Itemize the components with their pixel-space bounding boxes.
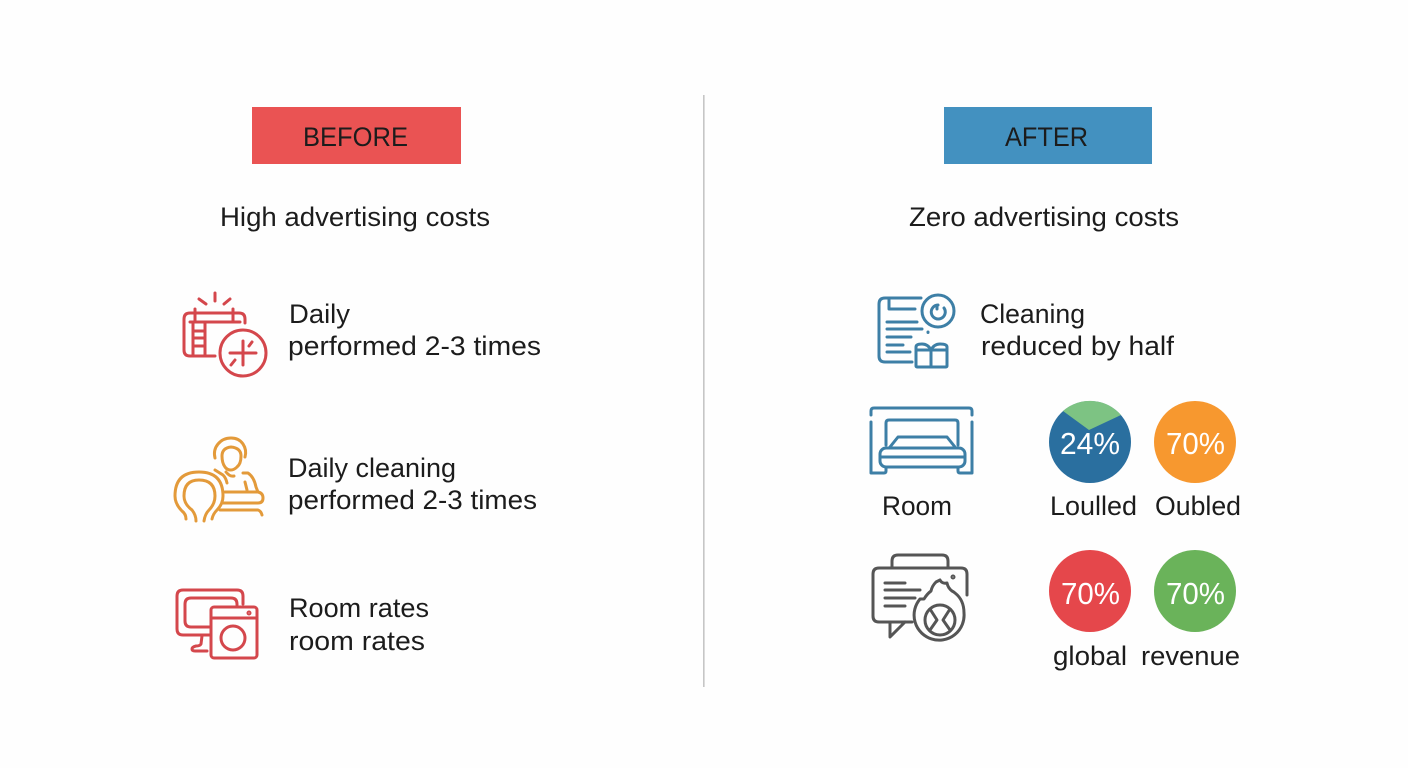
label: oubled: Oubled bbox=[1155, 491, 1241, 521]
text: cleaning reduced: Cleaning bbox=[980, 299, 1085, 329]
badge: orange 70 percent bbox=[1154, 401, 1236, 483]
badge: green 70 percent: 70% bbox=[1166, 576, 1225, 611]
text: room rates bbox=[289, 593, 429, 656]
badge: green 70 percent bbox=[1154, 550, 1236, 632]
icon: chat with ball bbox=[873, 555, 967, 640]
text: daily performed: performed 2-3 times bbox=[288, 331, 541, 361]
panel: after bbox=[871, 107, 1241, 671]
heading: after bbox=[944, 107, 1152, 164]
label: room: Room bbox=[882, 491, 952, 521]
subheading: zero advertising costs: Zero advertising costs bbox=[909, 202, 1179, 232]
text: daily performed bbox=[288, 299, 541, 361]
label: loulled: Loulled bbox=[1050, 491, 1137, 521]
badge: red 70 percent: 70% bbox=[1061, 576, 1120, 611]
text: daily cleaning: performed 2-3 times bbox=[288, 485, 537, 515]
text: room rates: room rates bbox=[289, 626, 425, 656]
heading: before bbox=[252, 107, 461, 164]
text: cleaning reduced bbox=[980, 299, 1175, 361]
icon: bed bbox=[871, 408, 972, 473]
badge: red 70 percent bbox=[1049, 550, 1131, 632]
text: daily cleaning: Daily cleaning bbox=[288, 453, 456, 483]
badge: orange 70 percent: 70% bbox=[1166, 426, 1225, 461]
label: revenue: revenue bbox=[1141, 641, 1240, 671]
chart: 24 percent pie: 24% bbox=[1060, 426, 1120, 461]
subheading: high advertising costs: High advertising costs bbox=[220, 202, 490, 232]
text: room rates: Room rates bbox=[289, 593, 429, 623]
text: daily cleaning bbox=[288, 453, 537, 515]
icon: document with gift bbox=[879, 295, 954, 367]
label: global: global bbox=[1053, 641, 1127, 671]
text: cleaning reduced: reduced by half bbox=[981, 331, 1175, 361]
heading: before: BEFORE bbox=[303, 122, 408, 152]
heading: after: AFTER bbox=[1005, 122, 1088, 152]
panel: before bbox=[175, 107, 541, 658]
text: daily performed: Daily bbox=[289, 299, 351, 329]
icon: cleaning worker bbox=[175, 438, 263, 521]
icon: calendar with plus bbox=[184, 293, 266, 376]
icon: monitor and washing machine bbox=[177, 590, 257, 658]
chart: 24 percent pie bbox=[1049, 401, 1131, 483]
